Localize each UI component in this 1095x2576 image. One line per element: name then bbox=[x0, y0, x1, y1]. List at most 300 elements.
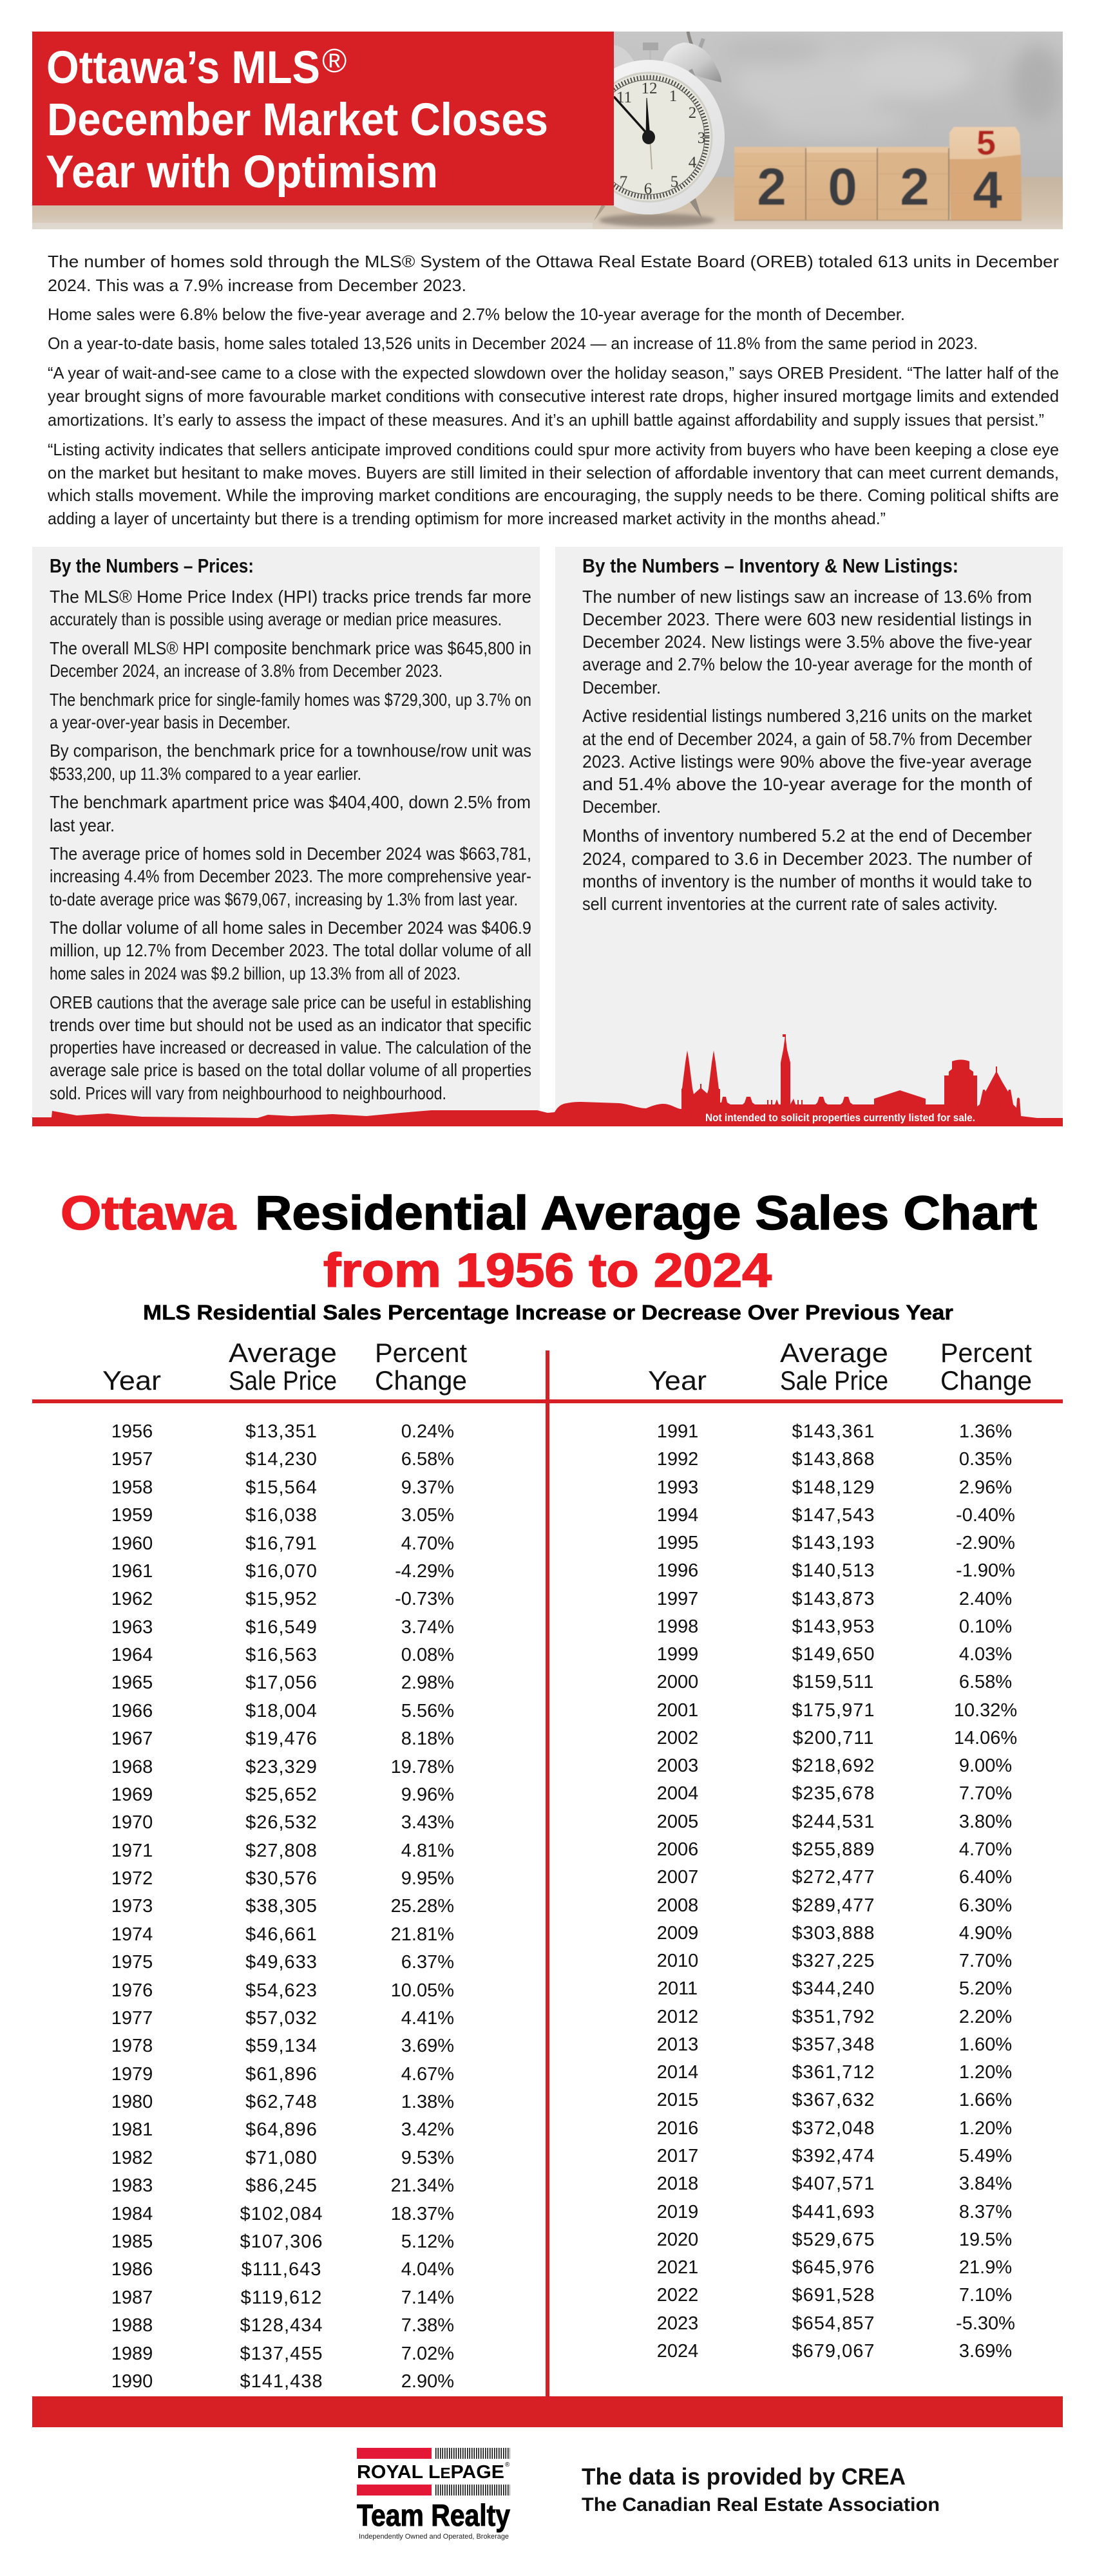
years column, 1956 to 1990: 1966 bbox=[111, 1701, 153, 1721]
intro text block: adding a layer of uncertainty but there is a trending optimism for more increased market activity in the months ahead.” bbox=[48, 509, 886, 528]
percent change column, 1956 to 1990: 2.98% bbox=[401, 1672, 454, 1693]
years column, 1991 to 2024: 1993 bbox=[657, 1477, 698, 1498]
Royal LePage Team Realty logo: Independently Owned and Operated, Brokerage bbox=[359, 2533, 509, 2541]
average sale price column, 1991 to 2024: $367,632 bbox=[792, 2090, 875, 2110]
years column, 1991 to 2024: 1999 bbox=[657, 1644, 698, 1665]
years column, 1991 to 2024: 1996 bbox=[657, 1560, 698, 1581]
wooden blocks: 4 bbox=[973, 161, 1002, 220]
average sale price column, 1956 to 1990: $16,563 bbox=[245, 1645, 318, 1665]
prices body text: By comparison, the benchmark price for a townhouse/row unit was bbox=[50, 741, 531, 761]
percent change column, 1956 to 1990: 18.37% bbox=[391, 2204, 454, 2224]
average sale price column, 1991 to 2024: $289,477 bbox=[792, 1895, 875, 1916]
percent change column, 1991 to 2024: 2.96% bbox=[959, 1477, 1012, 1498]
hero banner bbox=[32, 32, 1063, 229]
inventory body text: The number of new listings saw an increase of 13.6% from bbox=[582, 587, 1032, 607]
percent change column, 1991 to 2024: 4.90% bbox=[959, 1923, 1012, 1944]
years column, 1991 to 2024: 2008 bbox=[657, 1895, 698, 1916]
years column, 1991 to 2024: 1998 bbox=[657, 1616, 698, 1637]
intro text block: 2024. This was a 7.9% increase from December 2023. bbox=[48, 276, 466, 295]
average sale price column, 1956 to 1990: $62,748 bbox=[245, 2092, 318, 2112]
percent change column, 1991 to 2024: 7.70% bbox=[959, 1783, 1012, 1804]
Royal LePage Team Realty logo: ROYAL LEPAGE bbox=[357, 2462, 504, 2483]
years column, 1956 to 1990: 1968 bbox=[111, 1757, 153, 1777]
average sale price column, 1991 to 2024: $679,067 bbox=[792, 2341, 875, 2362]
disclaimer: Not intended to solicit properties currently listed for sale. bbox=[705, 1112, 975, 1124]
clock legs bbox=[594, 198, 702, 221]
wooden blocks: 5 bbox=[976, 124, 996, 162]
average sale price column, 1956 to 1990: $49,633 bbox=[245, 1952, 318, 1973]
table column headers: Sale Price bbox=[780, 1365, 888, 1396]
percent change column, 1956 to 1990: 25.28% bbox=[391, 1896, 454, 1917]
inventory heading: By the Numbers – Inventory & New Listings: bbox=[582, 554, 958, 577]
prices body text: properties have increased or decreased in value. The calculation of the bbox=[50, 1037, 531, 1057]
hero red title box: ® bbox=[322, 43, 347, 80]
average sale price column, 1991 to 2024: $147,543 bbox=[792, 1505, 875, 1526]
wooden blocks: 2 bbox=[757, 158, 786, 216]
percent change column, 1956 to 1990: 3.43% bbox=[401, 1812, 454, 1833]
years column, 1956 to 1990: 1958 bbox=[111, 1477, 153, 1498]
years column, 1956 to 1990: 1984 bbox=[111, 2204, 153, 2224]
years column, 1956 to 1990: 1971 bbox=[111, 1841, 153, 1861]
average sale price column, 1991 to 2024: $691,528 bbox=[792, 2285, 875, 2306]
inventory body text: months of inventory is the number of months it would take to bbox=[582, 871, 1032, 891]
percent change column, 1991 to 2024: 2.40% bbox=[959, 1589, 1012, 1609]
years column, 1991 to 2024: 2018 bbox=[657, 2174, 698, 2194]
percent change column, 1956 to 1990: -4.29% bbox=[395, 1561, 454, 1582]
prices body text: accurately than is possible using average or median price measures. bbox=[50, 609, 502, 629]
years column, 1956 to 1990: 1990 bbox=[111, 2371, 153, 2392]
years column, 1991 to 2024: 2015 bbox=[657, 2090, 698, 2110]
percent change column, 1956 to 1990: 1.38% bbox=[401, 2092, 454, 2112]
years column, 1956 to 1990: 1972 bbox=[111, 1868, 153, 1889]
percent change column, 1991 to 2024: 9.00% bbox=[959, 1756, 1012, 1776]
percent change column, 1956 to 1990: 0.08% bbox=[401, 1645, 454, 1665]
table column headers: Change bbox=[375, 1365, 467, 1396]
years column, 1956 to 1990: 1977 bbox=[111, 2008, 153, 2029]
inventory body text: 2023. Active listings were 90% above the five-year average bbox=[582, 752, 1032, 772]
average sale price column, 1991 to 2024: $645,976 bbox=[792, 2257, 875, 2278]
clock body: 7 bbox=[620, 173, 627, 191]
percent change column, 1991 to 2024: 5.49% bbox=[959, 2146, 1012, 2166]
average sale price column, 1956 to 1990: $16,549 bbox=[245, 1617, 318, 1638]
average sale price column, 1956 to 1990: $17,056 bbox=[245, 1672, 318, 1693]
years column, 1956 to 1990: 1979 bbox=[111, 2064, 153, 2085]
average sale price column, 1956 to 1990: $23,329 bbox=[245, 1757, 318, 1777]
percent change column, 1991 to 2024: 6.40% bbox=[959, 1867, 1012, 1888]
prices body text: sold. Prices will vary from neighbourhood to neighbourhood. bbox=[50, 1083, 446, 1103]
percent change column, 1991 to 2024: 3.80% bbox=[959, 1812, 1012, 1832]
percent change column, 1956 to 1990: 3.69% bbox=[401, 2036, 454, 2056]
percent change column, 1956 to 1990: 7.02% bbox=[401, 2344, 454, 2364]
inventory body text: December. bbox=[582, 677, 661, 697]
table column headers: Year bbox=[102, 1365, 161, 1396]
clock body: 1 bbox=[669, 88, 677, 105]
years column, 1991 to 2024: 2001 bbox=[657, 1700, 698, 1721]
percent change column, 1956 to 1990: 4.04% bbox=[401, 2259, 454, 2280]
Royal LePage Team Realty logo bbox=[357, 2448, 510, 2541]
percent change column, 1991 to 2024: -5.30% bbox=[956, 2313, 1015, 2334]
intro text block: which stalls movement. While the improving market conditions are encouraging, the supply needs to be there. Coming political shifts are bbox=[47, 486, 1059, 505]
average sale price column, 1991 to 2024: $244,531 bbox=[792, 1812, 875, 1832]
table column headers bbox=[102, 1338, 1032, 1396]
hero red title box: Year with Optimism bbox=[46, 147, 438, 198]
clock body: 4 bbox=[689, 154, 697, 171]
chart subtitle: MLS Residential Sales Percentage Increase or Decrease Over Previous Year bbox=[143, 1301, 953, 1324]
years column, 1991 to 2024: 2017 bbox=[657, 2146, 698, 2166]
hero red title box: December Market Closes bbox=[47, 95, 548, 146]
average sale price column, 1956 to 1990: $141,438 bbox=[240, 2371, 323, 2392]
average sale price column, 1956 to 1990: $107,306 bbox=[240, 2231, 323, 2252]
average sale price column, 1991 to 2024: $200,711 bbox=[793, 1728, 874, 1748]
percent change column, 1956 to 1990: 6.58% bbox=[401, 1449, 454, 1470]
average sale price column, 1991 to 2024: $235,678 bbox=[792, 1783, 875, 1804]
prices body text: The benchmark apartment price was $404,400, down 2.5% from bbox=[50, 792, 531, 812]
years column, 1956 to 1990: 1981 bbox=[111, 2119, 153, 2140]
average sale price column, 1991 to 2024: $357,348 bbox=[792, 2034, 875, 2055]
percent change column, 1956 to 1990 bbox=[391, 1421, 454, 2392]
table column headers: Year bbox=[648, 1365, 707, 1396]
inventory body text: Active residential listings numbered 3,216 units on the market bbox=[582, 706, 1032, 726]
years column, 1956 to 1990: 1961 bbox=[111, 1561, 153, 1582]
prices body text: million, up 12.7% from December 2023. The total dollar volume of all bbox=[50, 940, 531, 960]
years column, 1956 to 1990: 1989 bbox=[111, 2344, 153, 2364]
years column, 1991 to 2024: 2000 bbox=[657, 1672, 698, 1692]
years column, 1956 to 1990: 1974 bbox=[111, 1924, 153, 1945]
percent change column, 1956 to 1990: 4.70% bbox=[401, 1533, 454, 1554]
intro text block: amortizations. It’s early to assess the impact of these measures. And it’s an uphill battle against affordability and supply issues that persist.” bbox=[48, 410, 1044, 430]
percent change column, 1956 to 1990: 6.37% bbox=[401, 1952, 454, 1973]
data source credit: The Canadian Real Estate Association bbox=[582, 2494, 940, 2515]
inventory body text: December 2024. New listings were 3.5% above the five-year bbox=[582, 632, 1032, 652]
percent change column, 1956 to 1990: 3.05% bbox=[401, 1505, 454, 1526]
panel: by the numbers, prices bbox=[32, 547, 540, 1126]
prices body text: a year-over-year basis in December. bbox=[50, 712, 290, 732]
years column, 1956 to 1990: 1985 bbox=[111, 2231, 153, 2252]
clock body: 12 bbox=[642, 80, 657, 97]
average sale price column, 1991 to 2024: $272,477 bbox=[792, 1867, 875, 1888]
percent change column, 1956 to 1990: 0.24% bbox=[401, 1421, 454, 1442]
average sale price column, 1956 to 1990: $54,623 bbox=[245, 1980, 318, 2001]
percent change column, 1991 to 2024: 3.69% bbox=[959, 2341, 1012, 2362]
years column, 1956 to 1990: 1967 bbox=[111, 1728, 153, 1749]
average sale price column, 1991 to 2024: $327,225 bbox=[792, 1951, 875, 1971]
prices body text: The dollar volume of all home sales in December 2024 was $406.9 bbox=[50, 918, 531, 938]
average sale price column, 1956 to 1990: $46,661 bbox=[245, 1924, 318, 1945]
average sale price column, 1956 to 1990: $38,305 bbox=[245, 1896, 318, 1917]
percent change column, 1991 to 2024: -1.90% bbox=[956, 1560, 1015, 1581]
average sale price column, 1956 to 1990: $102,084 bbox=[240, 2204, 323, 2224]
years column, 1956 to 1990: 1973 bbox=[111, 1896, 153, 1917]
intro text block: “Listing activity indicates that sellers anticipate improved conditions could spur more activity from buyers who have been keeping a close eye bbox=[48, 440, 1059, 459]
average sale price column, 1991 to 2024: $143,868 bbox=[792, 1449, 875, 1470]
wooden blocks: 2 bbox=[900, 158, 929, 216]
average sale price column, 1956 to 1990 bbox=[240, 1421, 323, 2392]
years column, 1991 to 2024: 2023 bbox=[657, 2313, 698, 2334]
average sale price column, 1991 to 2024: $148,129 bbox=[792, 1477, 875, 1498]
table column headers: Sale Price bbox=[229, 1365, 337, 1396]
years column, 1956 to 1990: 1980 bbox=[111, 2092, 153, 2112]
intro text block: year brought signs of more favourable market conditions with consecutive interest rate drops, higher insured mortgage limits and extended bbox=[48, 386, 1059, 406]
percent change column, 1991 to 2024: 1.66% bbox=[959, 2090, 1012, 2110]
percent change column, 1956 to 1990: 10.05% bbox=[391, 1980, 454, 2001]
years column, 1956 to 1990: 1959 bbox=[111, 1505, 153, 1526]
intro text block: Home sales were 6.8% below the five-year average and 2.7% below the 10-year average for the month of December. bbox=[48, 305, 905, 324]
average sale price column, 1991 to 2024: $392,474 bbox=[792, 2146, 875, 2166]
wooden blocks bbox=[734, 124, 1022, 220]
years column, 1991 to 2024: 1997 bbox=[657, 1589, 698, 1609]
intro text block: “A year of wait-and-see came to a close with the expected slowdown over the holiday season,” says OREB President. “The latter half of the bbox=[48, 363, 1059, 383]
prices body text bbox=[50, 587, 531, 1103]
average sale price column, 1956 to 1990: $30,576 bbox=[245, 1868, 318, 1889]
average sale price column, 1956 to 1990: $26,532 bbox=[245, 1812, 318, 1833]
percent change column, 1991 to 2024: 21.9% bbox=[959, 2257, 1012, 2278]
prices body text: December 2024, an increase of 3.8% from December 2023. bbox=[50, 661, 443, 681]
average sale price column, 1956 to 1990: $19,476 bbox=[245, 1728, 318, 1749]
years column, 1956 to 1990: 1986 bbox=[111, 2259, 153, 2280]
percent change column, 1991 to 2024: 1.20% bbox=[959, 2118, 1012, 2139]
years column, 1956 to 1990: 1964 bbox=[111, 1645, 153, 1665]
average sale price column, 1956 to 1990: $64,896 bbox=[245, 2119, 318, 2140]
average sale price column, 1956 to 1990: $86,245 bbox=[245, 2175, 318, 2196]
prices body text: last year. bbox=[50, 815, 115, 835]
prices body text: $533,200, up 11.3% compared to a year earlier. bbox=[50, 764, 361, 784]
years column, 1956 to 1990: 1963 bbox=[111, 1617, 153, 1638]
average sale price column, 1956 to 1990: $71,080 bbox=[245, 2148, 318, 2168]
years column, 1991 to 2024: 2002 bbox=[657, 1728, 698, 1748]
average sale price column, 1956 to 1990: $14,230 bbox=[245, 1449, 318, 1470]
clock body bbox=[613, 60, 725, 214]
average sale price column, 1956 to 1990: $27,808 bbox=[245, 1841, 318, 1861]
years column, 1991 to 2024: 2013 bbox=[657, 2034, 698, 2055]
average sale price column, 1956 to 1990: $59,134 bbox=[245, 2036, 318, 2056]
average sale price column, 1956 to 1990: $15,952 bbox=[245, 1589, 318, 1609]
percent change column, 1956 to 1990: 4.41% bbox=[401, 2008, 454, 2029]
average sale price column, 1991 to 2024: $654,857 bbox=[792, 2313, 875, 2334]
inventory body text: average and 2.7% below the 10-year average for the month of bbox=[582, 654, 1032, 674]
years column, 1956 to 1990: 1987 bbox=[111, 2287, 153, 2308]
percent change column, 1991 to 2024: 4.70% bbox=[959, 1839, 1012, 1860]
years column, 1956 to 1990: 1969 bbox=[111, 1785, 153, 1805]
inventory body text: and 51.4% above the 10-year average for the month of bbox=[582, 774, 1032, 794]
percent change column, 1991 to 2024: 1.60% bbox=[959, 2034, 1012, 2055]
average sale price column, 1956 to 1990: $111,643 bbox=[242, 2259, 321, 2280]
prices body text: trends over time but should not be used as an indicator that specific bbox=[50, 1015, 531, 1035]
percent change column, 1991 to 2024: 5.20% bbox=[959, 1978, 1012, 1999]
average sale price column, 1991 to 2024: $303,888 bbox=[792, 1923, 875, 1944]
inventory body text: December. bbox=[582, 797, 661, 817]
inventory body text: December 2023. There were 603 new residential listings in bbox=[582, 609, 1032, 629]
prices body text: OREB cautions that the average sale price can be useful in establishing bbox=[50, 992, 531, 1012]
clock body: 2 bbox=[689, 104, 696, 122]
prices body text: The overall MLS® HPI composite benchmark price was $645,800 in bbox=[50, 638, 531, 658]
years column, 1991 to 2024: 2004 bbox=[657, 1783, 698, 1804]
average sale price column, 1956 to 1990: $16,791 bbox=[245, 1533, 318, 1554]
average sale price column, 1991 to 2024: $149,650 bbox=[792, 1644, 875, 1665]
table column headers: Percent bbox=[940, 1338, 1032, 1368]
years column, 1991 to 2024: 2021 bbox=[657, 2257, 698, 2278]
Royal LePage Team Realty logo: ® bbox=[505, 2461, 510, 2468]
percent change column, 1991 to 2024: -2.90% bbox=[956, 1533, 1015, 1553]
average sale price column, 1991 to 2024: $529,675 bbox=[792, 2230, 875, 2250]
Royal LePage Team Realty logo: Team Realty bbox=[357, 2498, 510, 2532]
average sale price column, 1991 to 2024: $361,712 bbox=[792, 2062, 875, 2083]
prices body text: home sales in 2024 was $9.2 billion, up 13.3% from all of 2023. bbox=[50, 963, 461, 983]
average sale price column, 1956 to 1990: $119,612 bbox=[241, 2287, 322, 2308]
average sale price column, 1991 to 2024: $140,513 bbox=[792, 1560, 875, 1581]
average sale price column, 1991 to 2024: $143,193 bbox=[792, 1533, 875, 1553]
prices body text: increasing 4.4% from December 2023. The more comprehensive year- bbox=[50, 866, 531, 886]
inventory body text: at the end of December 2024, a gain of 58.7% from December bbox=[582, 729, 1032, 749]
percent change column, 1956 to 1990: -0.73% bbox=[395, 1589, 454, 1609]
clock hands bbox=[614, 97, 655, 169]
percent change column, 1956 to 1990: 5.12% bbox=[401, 2231, 454, 2252]
inventory body text: sell current inventories at the current rate of sales activity. bbox=[582, 894, 998, 914]
percent change column, 1956 to 1990: 4.81% bbox=[401, 1841, 454, 1861]
percent change column, 1956 to 1990: 9.53% bbox=[401, 2148, 454, 2168]
percent change column, 1991 to 2024: 3.84% bbox=[959, 2174, 1012, 2194]
average sale price column, 1956 to 1990: $13,351 bbox=[245, 1421, 318, 1442]
percent change column, 1956 to 1990: 5.56% bbox=[401, 1701, 454, 1721]
percent change column, 1991 to 2024: 0.35% bbox=[959, 1449, 1012, 1470]
years column, 1991 to 2024 bbox=[657, 1421, 698, 2362]
years column, 1991 to 2024: 1992 bbox=[657, 1449, 698, 1470]
average sale price column, 1991 to 2024: $175,971 bbox=[792, 1700, 875, 1721]
percent change column, 1991 to 2024: 2.20% bbox=[959, 2007, 1012, 2027]
years column, 1956 to 1990: 1957 bbox=[111, 1449, 153, 1470]
average sale price column, 1956 to 1990: $18,004 bbox=[245, 1701, 318, 1721]
average sale price column, 1991 to 2024 bbox=[792, 1421, 875, 2362]
chart title: Residential Average Sales Chart bbox=[255, 1186, 1037, 1240]
percent change column, 1956 to 1990: 2.90% bbox=[401, 2371, 454, 2392]
percent change column, 1991 to 2024: 7.70% bbox=[959, 1951, 1012, 1971]
years column, 1991 to 2024: 2022 bbox=[657, 2285, 698, 2306]
inventory body text: Months of inventory numbered 5.2 at the end of December bbox=[582, 826, 1032, 846]
red Ottawa skyline band bbox=[32, 1034, 1063, 1126]
average sale price column, 1956 to 1990: $25,652 bbox=[245, 1785, 318, 1805]
chart title bbox=[61, 1186, 1037, 1297]
percent change column, 1956 to 1990: 3.42% bbox=[401, 2119, 454, 2140]
years column, 1991 to 2024: 2020 bbox=[657, 2230, 698, 2250]
average sale price column, 1956 to 1990: $15,564 bbox=[245, 1477, 318, 1498]
average sale price column, 1991 to 2024: $351,792 bbox=[792, 2007, 875, 2027]
years column, 1956 to 1990: 1962 bbox=[111, 1589, 153, 1609]
prices body text: The MLS® Home Price Index (HPI) tracks price trends far more bbox=[50, 587, 531, 607]
years column, 1956 to 1990: 1975 bbox=[111, 1952, 153, 1973]
average sale price column, 1991 to 2024: $255,889 bbox=[792, 1839, 875, 1860]
percent change column, 1956 to 1990: 9.37% bbox=[401, 1477, 454, 1498]
prices heading: By the Numbers – Prices: bbox=[50, 554, 254, 577]
average sale price column, 1956 to 1990: $61,896 bbox=[245, 2064, 318, 2085]
panel: by the numbers, inventory and new listings bbox=[555, 547, 1063, 1126]
years column, 1956 to 1990: 1970 bbox=[111, 1812, 153, 1833]
data source credit bbox=[582, 2463, 940, 2515]
average sale price column, 1991 to 2024: $143,873 bbox=[792, 1589, 875, 1609]
years column, 1991 to 2024: 1994 bbox=[657, 1505, 698, 1526]
intro text block bbox=[47, 252, 1059, 528]
years column, 1956 to 1990: 1960 bbox=[111, 1533, 153, 1554]
years column, 1956 to 1990: 1956 bbox=[111, 1421, 153, 1442]
chart title: from 1956 to 2024 bbox=[323, 1244, 772, 1297]
percent change column, 1956 to 1990: 7.14% bbox=[401, 2287, 454, 2308]
table: years 1991 to 2024 bbox=[657, 1421, 1017, 2362]
hero photo: alarm clock and 2024/2025 wooden blocks bbox=[32, 32, 1063, 229]
percent change column, 1991 to 2024: 1.36% bbox=[959, 1421, 1012, 1442]
inventory body text bbox=[582, 587, 1032, 914]
years column, 1991 to 2024: 2016 bbox=[657, 2118, 698, 2139]
percent change column, 1991 to 2024: 8.37% bbox=[959, 2202, 1012, 2222]
years column, 1991 to 2024: 2012 bbox=[657, 2007, 698, 2027]
percent change column, 1956 to 1990: 7.38% bbox=[401, 2315, 454, 2336]
percent change column, 1956 to 1990: 9.95% bbox=[401, 1868, 454, 1889]
average sale price column, 1956 to 1990: $137,455 bbox=[240, 2344, 323, 2364]
hero red title box: Ottawa’s MLS bbox=[46, 43, 320, 93]
years column, 1991 to 2024: 2003 bbox=[657, 1756, 698, 1776]
table column headers: Percent bbox=[375, 1338, 467, 1368]
average sale price column, 1991 to 2024: $344,240 bbox=[792, 1978, 875, 1999]
years column, 1991 to 2024: 2010 bbox=[657, 1951, 698, 1971]
average sale price column, 1991 to 2024: $441,693 bbox=[792, 2202, 875, 2222]
inventory body text: 2024, compared to 3.6 in December 2023. The number of bbox=[582, 849, 1032, 869]
years column, 1956 to 1990: 1988 bbox=[111, 2315, 153, 2336]
years column, 1991 to 2024: 1995 bbox=[657, 1533, 698, 1553]
percent change column, 1991 to 2024: 4.03% bbox=[959, 1644, 1012, 1665]
average sale price column, 1991 to 2024: $218,692 bbox=[792, 1756, 875, 1776]
years column, 1991 to 2024: 2009 bbox=[657, 1923, 698, 1944]
prices body text: average sale price is based on the total dollar volume of all properties bbox=[50, 1060, 531, 1080]
percent change column, 1956 to 1990: 21.81% bbox=[391, 1924, 454, 1945]
table column headers: Average bbox=[229, 1338, 337, 1368]
percent change column, 1991 to 2024: 6.30% bbox=[959, 1895, 1012, 1916]
clock body: 5 bbox=[671, 173, 678, 191]
clock body: 6 bbox=[644, 180, 652, 198]
clock body: 3 bbox=[698, 129, 705, 147]
prices body text: The average price of homes sold in December 2024 was $663,781, bbox=[50, 844, 531, 864]
average sale price column, 1991 to 2024: $159,511 bbox=[793, 1672, 874, 1692]
percent change column, 1991 to 2024: 1.20% bbox=[959, 2062, 1012, 2083]
percent change column, 1991 to 2024: 10.32% bbox=[954, 1700, 1017, 1721]
intro text block: On a year-to-date basis, home sales totaled 13,526 units in December 2024 — an increase of 11.8% from the same period in 2023. bbox=[48, 334, 978, 353]
years column, 1991 to 2024: 2011 bbox=[658, 1978, 698, 1999]
years column, 1956 to 1990 bbox=[111, 1421, 153, 2392]
percent change column, 1956 to 1990: 3.74% bbox=[401, 1617, 454, 1638]
prices body text: The benchmark price for single-family homes was $729,300, up 3.7% on bbox=[50, 690, 531, 710]
percent change column, 1991 to 2024: 14.06% bbox=[954, 1728, 1017, 1748]
years column, 1991 to 2024: 2014 bbox=[657, 2062, 698, 2083]
average sale price column, 1991 to 2024: $143,361 bbox=[792, 1421, 875, 1442]
years column, 1956 to 1990: 1965 bbox=[111, 1672, 153, 1693]
table column headers: Change bbox=[940, 1365, 1032, 1396]
percent change column, 1956 to 1990: 8.18% bbox=[401, 1728, 454, 1749]
average sale price column, 1991 to 2024: $372,048 bbox=[792, 2118, 875, 2139]
intro text block: on the market but hesitant to make moves. Buyers are still limited in their selection of affordable inventory that can meet current demands, bbox=[48, 463, 1059, 482]
percent change column, 1991 to 2024: 6.58% bbox=[959, 1672, 1012, 1692]
years column, 1991 to 2024: 2024 bbox=[657, 2341, 698, 2362]
years column, 1956 to 1990: 1976 bbox=[111, 1980, 153, 2001]
percent change column, 1991 to 2024: 19.5% bbox=[959, 2230, 1012, 2250]
years column, 1991 to 2024: 2006 bbox=[657, 1839, 698, 1860]
percent change column, 1991 to 2024 bbox=[954, 1421, 1017, 2362]
average sale price column, 1956 to 1990: $57,032 bbox=[245, 2008, 318, 2029]
average sale price column, 1991 to 2024: $407,571 bbox=[792, 2174, 875, 2194]
years column, 1956 to 1990: 1982 bbox=[111, 2148, 153, 2168]
percent change column, 1956 to 1990: 21.34% bbox=[391, 2175, 454, 2196]
hero red title box bbox=[32, 32, 614, 205]
average sale price column, 1991 to 2024: $143,953 bbox=[792, 1616, 875, 1637]
average sale price column, 1956 to 1990: $16,070 bbox=[245, 1561, 318, 1582]
years column, 1991 to 2024: 2019 bbox=[657, 2202, 698, 2222]
average sale price column, 1956 to 1990: $16,038 bbox=[245, 1505, 318, 1526]
clock body: 11 bbox=[616, 89, 632, 106]
